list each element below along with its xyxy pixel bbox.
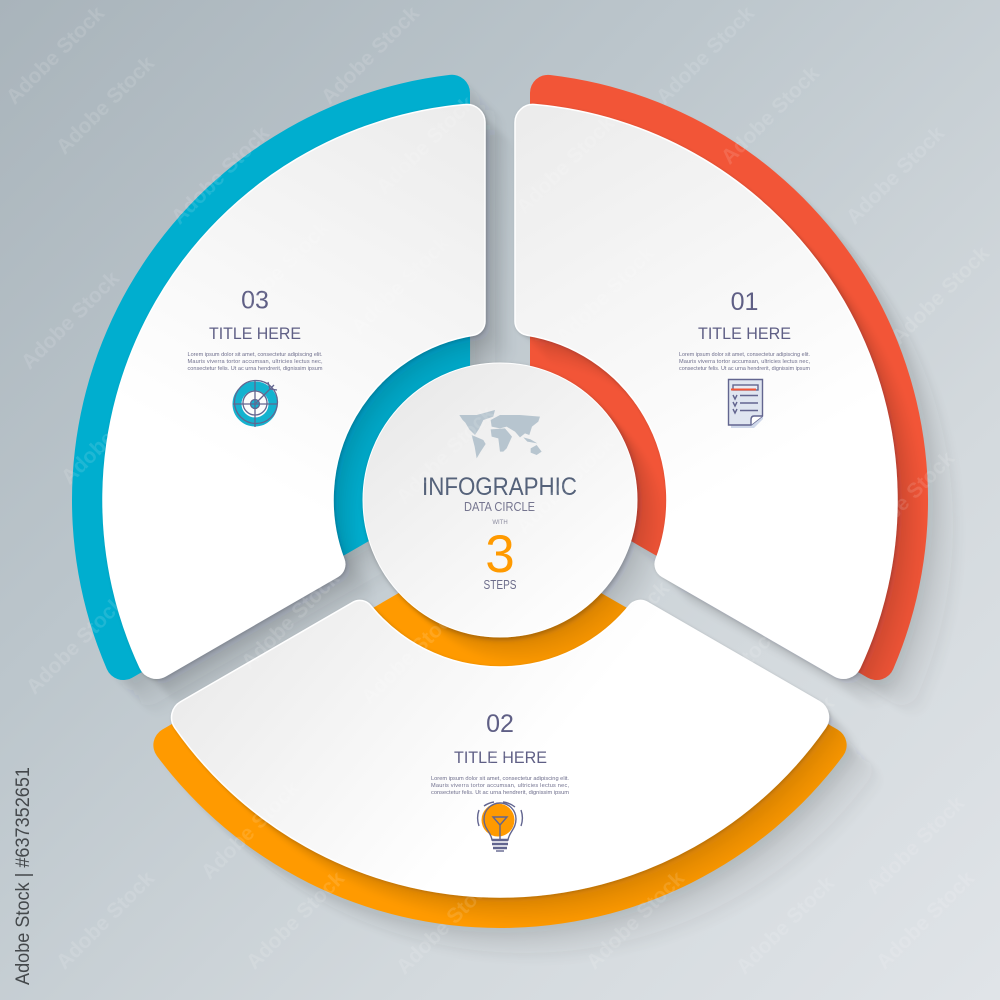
watermark: Adobe Stock bbox=[842, 122, 949, 229]
body 01 bbox=[679, 352, 810, 372]
watermark: Adobe Stock bbox=[237, 567, 344, 674]
watermark: Adobe Stock bbox=[552, 242, 659, 349]
title 02: TITLE HERE bbox=[454, 748, 547, 767]
watermark: Adobe Stock bbox=[652, 2, 759, 109]
watermark: Adobe Stock bbox=[407, 742, 514, 849]
watermark: Adobe Stock bbox=[512, 112, 619, 219]
centre title bbox=[422, 473, 577, 592]
number 01: 01 bbox=[731, 288, 758, 316]
watermark: Adobe Stock bbox=[582, 867, 689, 974]
number: 3: 3 bbox=[485, 525, 515, 584]
watermark: Adobe Stock bbox=[57, 382, 164, 489]
watermark: Adobe Stock bbox=[392, 402, 499, 509]
text block: step 02 bbox=[431, 710, 569, 796]
body 01: Lorem ipsum dolor sit amet, consectetur adipiscing elit. bbox=[679, 352, 810, 358]
watermark: Adobe Stock bbox=[347, 232, 454, 339]
panel: step 03 card bbox=[103, 104, 485, 678]
icon: document checklist bbox=[728, 380, 763, 428]
watermark: Adobe Stock bbox=[732, 872, 839, 979]
watermark: Adobe Stock bbox=[887, 242, 994, 349]
watermark: Adobe Stock bbox=[717, 62, 824, 169]
body 02: Lorem ipsum dolor sit amet, consectetur adipiscing elit. bbox=[431, 776, 569, 782]
side credit text: Adobe Stock | #637352651 bbox=[13, 767, 34, 985]
watermark: Adobe Stock bbox=[52, 867, 159, 974]
centre circle bbox=[363, 363, 637, 637]
body 03 bbox=[188, 352, 323, 372]
icon: world map bbox=[459, 410, 542, 458]
body 01: consectetur felis. Ut ac urna hendrerit, dignissim ipsum bbox=[679, 366, 810, 372]
watermark: Adobe Stock bbox=[372, 92, 479, 199]
watermark: Adobe Stock bbox=[227, 217, 334, 324]
watermark: Adobe Stock bbox=[852, 447, 959, 554]
heading: infographic: INFOGRAPHIC bbox=[422, 473, 577, 501]
watermark: Adobe Stock bbox=[167, 122, 274, 229]
body 03: Mauris viverra tortor accumsan, ultricies lectus nec, bbox=[188, 359, 323, 365]
body 02 bbox=[431, 776, 569, 796]
number 02: 02 bbox=[486, 710, 514, 738]
watermark: Adobe Stock bbox=[532, 792, 639, 899]
title 01: TITLE HERE bbox=[698, 324, 791, 343]
title 03: TITLE HERE bbox=[209, 324, 301, 343]
body 03: consectetur felis. Ut ac urna hendrerit, dignissim ipsum bbox=[188, 366, 323, 372]
subheading: data circle: DATA CIRCLE bbox=[464, 500, 535, 514]
watermark: Adobe Stock bbox=[17, 267, 124, 374]
body 02: consectetur felis. Ut ac urna hendrerit, dignissim ipsum bbox=[431, 790, 569, 796]
band: red step 01 bbox=[530, 75, 928, 680]
watermark: Adobe Stock bbox=[732, 692, 839, 799]
coloured bands bbox=[72, 75, 928, 928]
watermark: Adobe Stock bbox=[727, 412, 834, 519]
watermark: Adobe Stock bbox=[512, 432, 619, 539]
long shadow of white panels and centre circle bbox=[108, 109, 927, 927]
icon: target bbox=[233, 380, 278, 427]
watermark: Adobe Stock bbox=[392, 872, 499, 979]
body 01: Mauris viverra tortor accumsan, ultricies lectus nec, bbox=[679, 359, 810, 365]
watermark: Adobe Stock bbox=[862, 792, 969, 899]
number 03: 03 bbox=[241, 286, 269, 314]
text block: step 03 bbox=[188, 286, 323, 372]
long shadow of coloured bands bbox=[77, 80, 963, 963]
watermark: Adobe Stock bbox=[872, 867, 979, 974]
panel: step 01 card bbox=[515, 104, 897, 678]
band: blue step 03 bbox=[72, 75, 470, 680]
watermark: Adobe Stock bbox=[22, 592, 129, 699]
text block: step 01 bbox=[679, 288, 810, 372]
label: with: WITH bbox=[492, 520, 508, 526]
body 02: Mauris viverra tortor accumsan, ultricies lectus nec, bbox=[431, 783, 569, 789]
label: steps: STEPS bbox=[484, 578, 516, 592]
body 03: Lorem ipsum dolor sit amet, consectetur adipiscing elit. bbox=[188, 352, 323, 358]
watermark: Adobe Stock bbox=[2, 2, 109, 109]
icon: light bulb bbox=[478, 802, 522, 851]
watermark: Adobe Stock bbox=[677, 622, 784, 729]
watermark: Adobe Stock bbox=[197, 777, 304, 884]
watermark: Adobe Stock bbox=[567, 577, 674, 684]
band: orange step 02 bbox=[153, 589, 847, 928]
watermark: Adobe Stock bbox=[357, 602, 464, 709]
watermark: Adobe Stock bbox=[317, 2, 424, 109]
watermark: Adobe Stock bbox=[242, 867, 349, 974]
watermark: Adobe Stock bbox=[187, 432, 294, 539]
watermark: Adobe Stock bbox=[52, 52, 159, 159]
panel: step 02 card bbox=[172, 600, 828, 897]
